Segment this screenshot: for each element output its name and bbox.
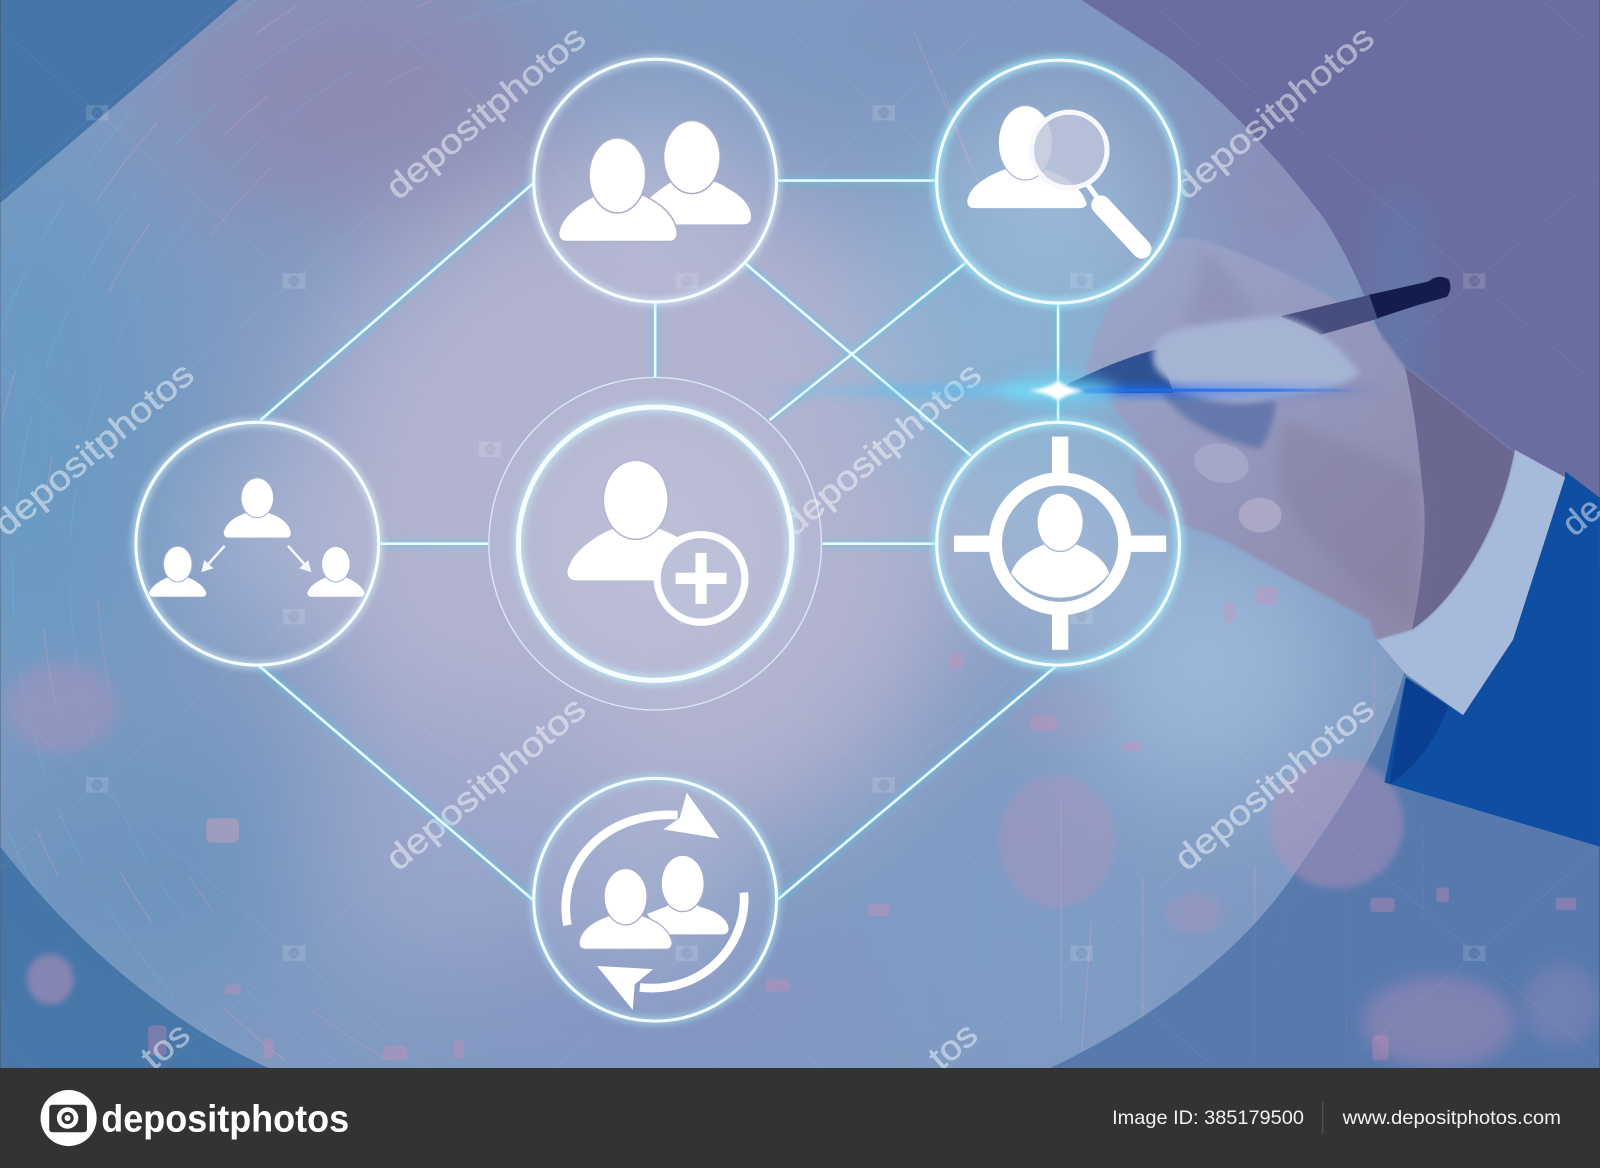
image id: Image ID: 385179500 — [1112, 1107, 1304, 1129]
icon: magnifier over person — [967, 106, 1142, 249]
hand outside disc (darker) — [1405, 367, 1514, 629]
under-thumb shadow — [1153, 379, 1275, 449]
node: rotating people — [534, 778, 777, 1021]
bottom banner — [0, 1068, 1600, 1168]
pink confetti — [148, 587, 1576, 1060]
watermarks: large diagonal text: tos — [134, 1015, 197, 1077]
website: www.depositphotos.com — [1342, 1107, 1561, 1129]
top-right purple backdrop — [1082, 0, 1600, 571]
node: hierarchy of people — [136, 422, 379, 665]
icon: three people with arrows — [149, 478, 364, 597]
jacket sleeve — [1385, 471, 1600, 847]
logo wordmark: depositphotos — [101, 1097, 349, 1139]
watermarks: large diagonal text: depositphotos — [1167, 690, 1382, 878]
bokeh blobs — [5, 661, 1600, 1068]
camera watermarks — [86, 105, 1485, 961]
watermarks: large diagonal text: tos — [921, 1015, 985, 1077]
finger nails — [1190, 438, 1252, 488]
thumb — [1153, 316, 1359, 400]
icon: two people — [559, 121, 751, 241]
pen back end — [1280, 277, 1450, 335]
icon: crosshair on person — [954, 437, 1166, 650]
vertical dashed streaks right — [913, 31, 1423, 1061]
node: add person (centre) — [489, 377, 821, 710]
node: target person — [937, 422, 1179, 665]
watermarks: large diagonal text: depositphotos — [379, 690, 593, 878]
darker corners outside translucent disc — [0, 0, 238, 203]
star-trail streaks — [0, 0, 572, 1061]
pen tip — [1061, 349, 1173, 394]
node: two people — [534, 59, 777, 302]
connector lines — [259, 181, 1058, 900]
lens flare at pen tip — [735, 374, 1388, 407]
logo icon: camera — [41, 1090, 97, 1146]
icon: refresh arrows around two people — [566, 793, 744, 1010]
watermarks: large diagonal text: depositphotos — [1167, 19, 1382, 207]
node: person search — [937, 60, 1179, 303]
hand palm — [1084, 238, 1514, 640]
knuckle crease shadow — [1178, 243, 1260, 324]
watermarks: large diagonal text: depositphotos — [379, 19, 593, 207]
shirt cuff — [1376, 450, 1565, 715]
watermarks: large diagonal text — [0, 19, 1382, 1077]
watermarks: large diagonal text: depositphotos — [775, 355, 989, 544]
hand holding pen — [1061, 238, 1600, 847]
icon: person with plus — [567, 461, 745, 622]
palm wrinkles — [1279, 418, 1420, 622]
